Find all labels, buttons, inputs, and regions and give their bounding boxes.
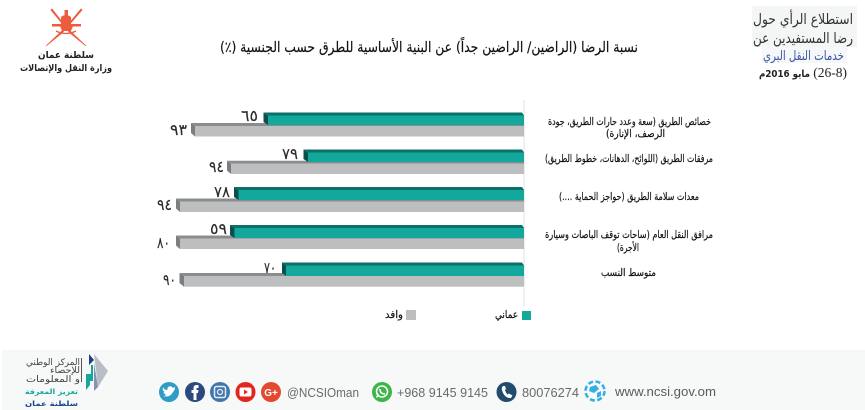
text: sultanate name: سلطنة عمان (38, 50, 94, 61)
text: ministry name: وزارة النقل والإتصالات (20, 63, 112, 74)
label: public transport facilities line 2: الأجرة) (617, 241, 639, 254)
legend label: Omani: عماني (495, 309, 518, 321)
value: Omani 59: ٥٩ (210, 220, 227, 238)
icon: youtube (236, 382, 256, 402)
value: Omani 78: ٧٨ (214, 183, 230, 201)
label: road accessories: مرفقات الطريق (اللوائح، الدهانات، خطوط الطريق) (545, 153, 713, 165)
value: expat 93: ٩٣ (170, 121, 187, 139)
text: survey dates (759, 65, 847, 80)
category labels (545, 116, 713, 279)
label: road characteristics line 2: الرصف، الإنارة) (606, 128, 665, 140)
icon: globe (586, 382, 604, 400)
bar row: road accessories (209, 145, 524, 176)
legend (385, 309, 531, 321)
bar: Omani 78 (234, 187, 524, 200)
bar: expat 80 (176, 236, 524, 249)
text: slogan: تعزيز المعرفة (25, 388, 78, 396)
bar: Omani 79 (304, 150, 524, 162)
value: Omani 79: ٧٩ (282, 145, 298, 163)
text: website: www.ncsi.gov.om (614, 384, 716, 399)
icon: instagram (210, 382, 230, 402)
icon: khanjar and crossed swords (46, 9, 86, 46)
value: expat 80: ٨٠ (157, 234, 170, 252)
value: Omani 65: ٦٥ (241, 107, 258, 125)
label: road safety equipment: معدات سلامة الطريق (حواجز الحماية ....) (559, 191, 699, 203)
icon: facebook (185, 382, 205, 402)
icon: NCSI mark (86, 354, 108, 391)
bar row: public transport facilities (157, 220, 524, 252)
panel: footer (2, 350, 865, 410)
bar: expat 94 (176, 198, 524, 212)
text: survey dates: مايو 2016م (759, 69, 810, 80)
label: road characteristics line 1: خصائص الطريق (سعة وعدد حارات الطريق، جودة (548, 116, 711, 128)
label: public transport facilities line 1: مرافق النقل العام (ساحات توقف الباصات وسيارة (545, 229, 713, 241)
icon: phone (496, 382, 516, 402)
icon: whatsapp (372, 382, 392, 402)
icon: google plus: G+ (264, 388, 278, 399)
bar: expat 90 (180, 273, 524, 287)
legend swatch: expat (406, 310, 416, 320)
value: Omani 70: ٧٠ (264, 259, 276, 277)
bar chart: satisfaction by nationality (157, 107, 524, 289)
bar: expat 94 (227, 161, 524, 174)
axis line (524, 100, 525, 306)
bar: Omani 59 (230, 225, 524, 238)
text: Sultanate of Oman: سلطنة عمان (25, 400, 78, 408)
icon: twitter (159, 382, 179, 402)
bar: Omani 70 (282, 262, 524, 276)
legend label: expat: وافد (385, 309, 403, 321)
bar row: average (163, 259, 524, 289)
bar row: road safety equipment (157, 183, 524, 214)
icon: google plus (261, 382, 281, 402)
value: expat 94: ٩٤ (209, 158, 224, 176)
bar: expat 93 (191, 123, 524, 136)
value: expat 90: ٩٠ (163, 271, 176, 289)
title: نسبة الرضا (الراضين/ الراضين جداً) عن البنية الأساسية للطرق حسب الجنسية (٪) (220, 37, 638, 56)
text: social handle: @NCSIOman (287, 385, 359, 400)
text: centre name line 3: و المعلومات (26, 375, 80, 385)
bar: Omani 65 (264, 112, 524, 125)
logo: NCSI (25, 354, 108, 408)
text: toll-free number: 80076274 (522, 385, 579, 400)
legend swatch: Omani (522, 311, 531, 320)
text: service name: خدمات النقل البري (763, 49, 844, 64)
panel: survey title block (752, 6, 857, 80)
logo: Oman emblem and ministry name (20, 9, 112, 74)
text: survey dates: (26-8) (813, 65, 847, 80)
text: whatsapp number: +968 9145 9145 (397, 385, 488, 400)
label: average: متوسط النسب (601, 267, 656, 279)
bar row: road characteristics (170, 107, 524, 139)
text: centre name line 1: المركز الوطني (26, 358, 80, 368)
value: expat 94: ٩٤ (157, 196, 172, 214)
text: centre name line 2: للإحصاء (50, 366, 80, 376)
